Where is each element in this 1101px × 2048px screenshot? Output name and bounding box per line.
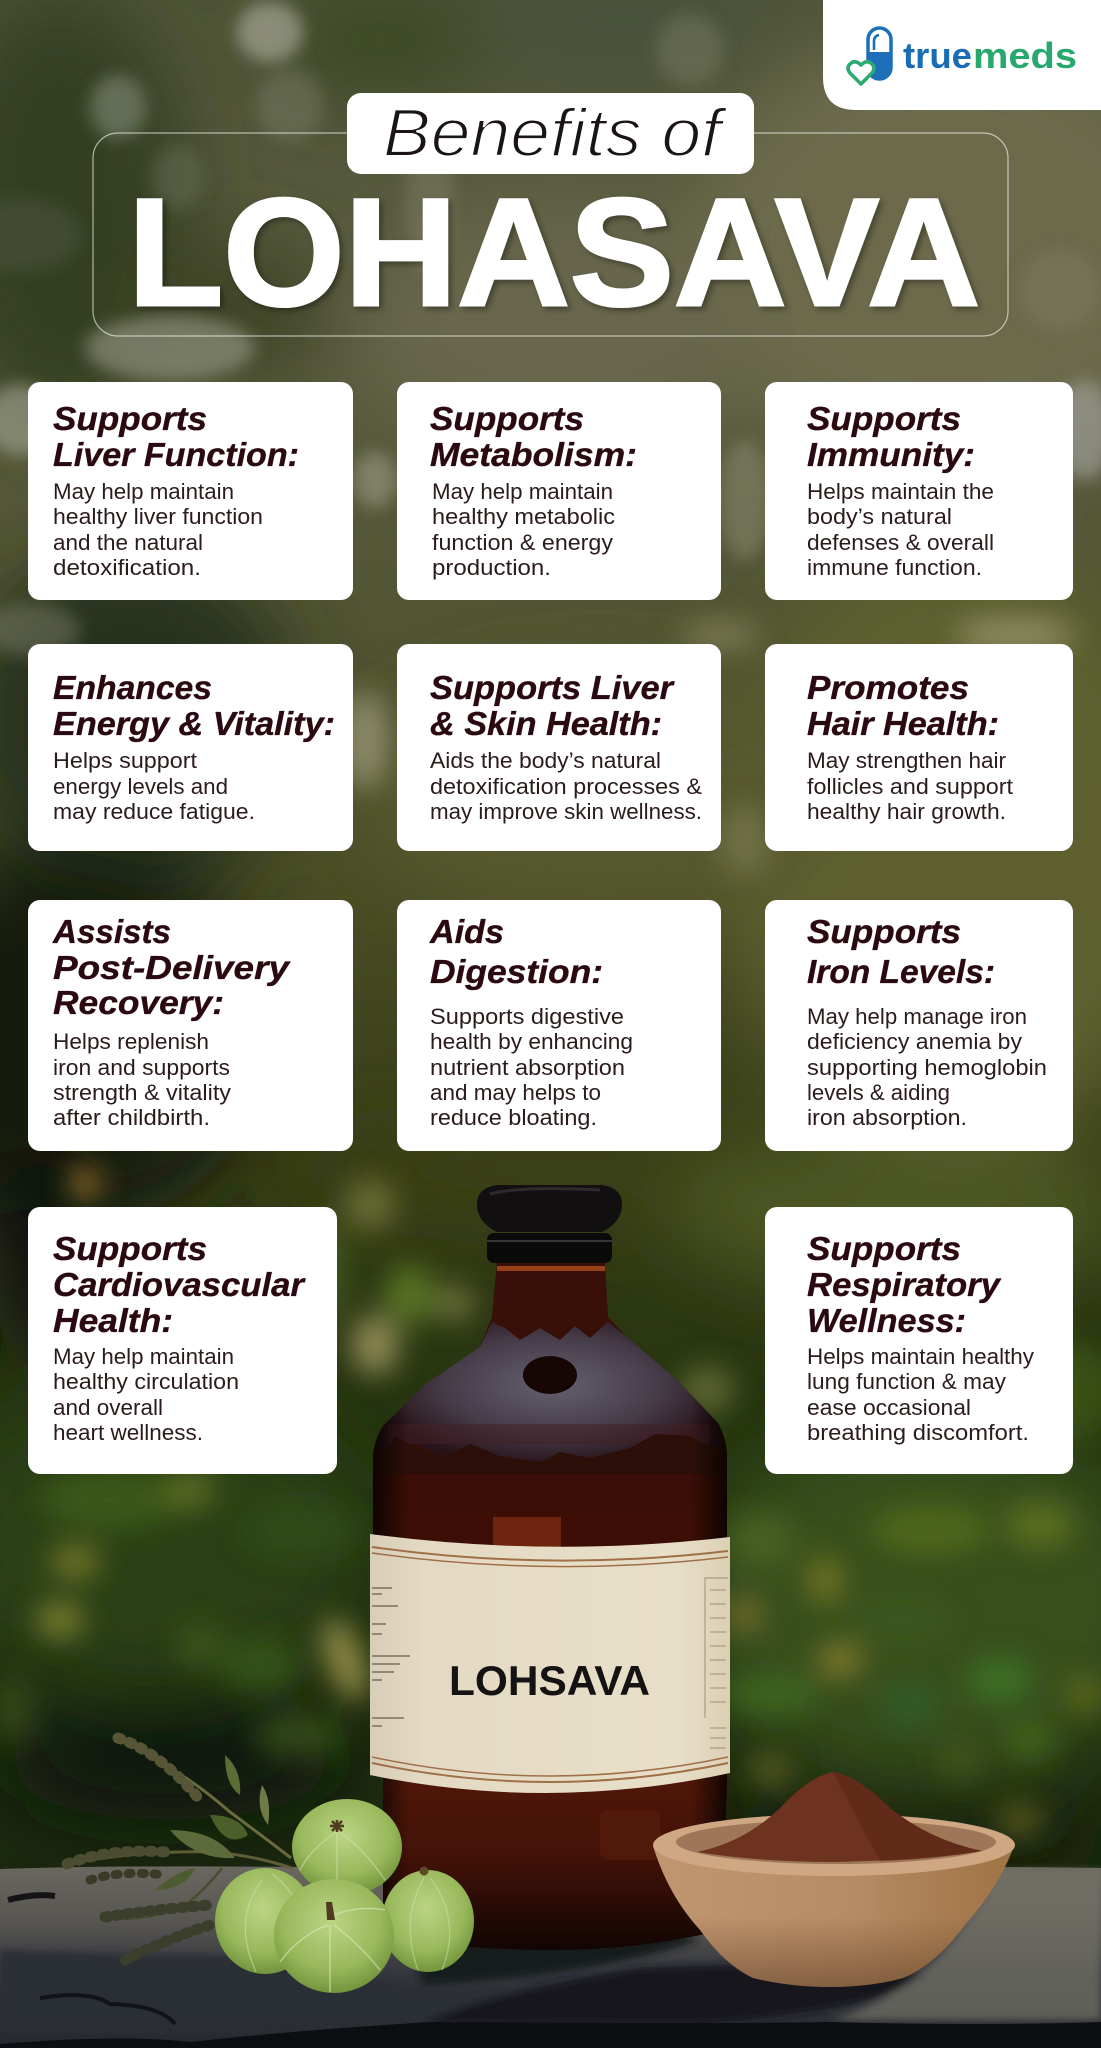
heading: Iron Levels:: [807, 953, 995, 990]
body text: and overall: [53, 1395, 163, 1420]
logo panel: truemeds: [823, 0, 1101, 110]
heading: Enhances: [53, 669, 212, 706]
body text: strength & vitality: [53, 1080, 231, 1105]
heading: [53, 1230, 306, 1339]
body text: [432, 479, 615, 580]
body text: May help maintain: [53, 1344, 234, 1369]
body text: [53, 1344, 239, 1445]
body text: May help maintain: [53, 479, 234, 504]
bowl rim: [653, 1814, 1015, 1876]
body text: [53, 1029, 231, 1130]
body text: [807, 479, 994, 580]
body text: supporting hemoglobin: [807, 1055, 1047, 1080]
body text: follicles and support: [807, 774, 1013, 799]
body text: May help manage iron: [807, 1004, 1027, 1029]
body text: lung function & may: [807, 1369, 1006, 1394]
heading: Digestion:: [430, 953, 603, 990]
heading: Hair Health:: [807, 705, 999, 742]
label text: LOHSAVA: LOHSAVA: [449, 1657, 650, 1704]
body text: body’s natural: [807, 504, 952, 529]
heading: Supports: [807, 913, 961, 950]
card: Supports Metabolism: [397, 382, 721, 600]
logo wordmark: meds: [973, 35, 1077, 76]
amla: front: [274, 1879, 394, 1993]
body text: ease occasional: [807, 1395, 971, 1420]
body text: detoxification processes &: [430, 774, 702, 799]
body text: [807, 1004, 1047, 1130]
amla: top: [292, 1799, 402, 1895]
body text: production.: [432, 555, 551, 580]
stone slab: [0, 1866, 1101, 2048]
body text: nutrient absorption: [430, 1055, 625, 1080]
logo wordmark: true: [903, 35, 972, 76]
heading: [53, 400, 299, 473]
powder mound: [697, 1772, 982, 1862]
body text: defenses & overall: [807, 530, 994, 555]
body text: [430, 748, 702, 824]
body text: Helps maintain the: [807, 479, 994, 504]
icon: capsule with heart: [848, 28, 891, 84]
body text: and may helps to: [430, 1080, 601, 1105]
body text: immune function.: [807, 555, 982, 580]
bowl of powder: [653, 1772, 1015, 1987]
body text: reduce bloating.: [430, 1105, 597, 1130]
bowl inner: [676, 1820, 996, 1864]
card: Supports Respiratory Wellness: [765, 1207, 1073, 1474]
body text: Helps maintain healthy: [807, 1344, 1034, 1369]
heading: Assists: [52, 913, 171, 950]
body text: deficiency anemia by: [807, 1029, 1022, 1054]
body text: healthy liver function: [53, 504, 263, 529]
amla fruits: [215, 1799, 474, 1993]
heading: [807, 400, 975, 473]
body text: Aids the body’s natural: [430, 748, 661, 773]
body text: [53, 748, 255, 824]
body text: Supports digestive: [430, 1004, 624, 1029]
heading: [429, 913, 603, 990]
body text: health by enhancing: [430, 1029, 633, 1054]
heading: Aids: [429, 913, 504, 950]
body text: iron absorption.: [807, 1105, 967, 1130]
body text: energy levels and: [53, 774, 228, 799]
card: Aids Digestion: [397, 900, 721, 1151]
heading: [430, 400, 637, 473]
heading: [807, 669, 999, 742]
body text: levels & aiding: [807, 1080, 950, 1105]
card: Supports Immunity: [765, 382, 1073, 600]
body text: may reduce fatigue.: [53, 799, 255, 824]
body text: [53, 479, 263, 580]
amla: left: [215, 1868, 315, 1974]
card: Promotes Hair Health: [765, 644, 1073, 851]
heading: Supports: [807, 400, 961, 437]
heading: Recovery:: [53, 984, 224, 1021]
amla: right: [382, 1866, 474, 1972]
card: Supports Iron Levels: [765, 900, 1073, 1151]
title pill: Benefits of: Benefits of: [383, 95, 727, 171]
title: LOHASAVA: LOHASAVA: [128, 167, 980, 338]
body text: [807, 1344, 1034, 1445]
card: Supports Liver Function: [28, 382, 353, 600]
heading: Supports: [53, 400, 207, 437]
body text: function & energy: [432, 530, 613, 555]
title block: [93, 93, 1008, 338]
bottle label: [370, 1534, 730, 1793]
body text: heart wellness.: [53, 1420, 203, 1445]
heading: [807, 913, 995, 990]
card: Enhances Energy & Vitality: [28, 644, 353, 851]
bottle: [370, 1185, 730, 1950]
heading: [52, 913, 291, 1021]
card: Supports Cardiovascular Health: [28, 1207, 337, 1474]
heading: Supports Liver: [430, 669, 675, 706]
heading: Wellness:: [807, 1302, 966, 1339]
body text: healthy metabolic: [432, 504, 615, 529]
logo wordmark: [903, 35, 1077, 76]
bottle glass with amber liquid: [373, 1262, 727, 1950]
body text: May strengthen hair: [807, 748, 1006, 773]
heading: Immunity:: [807, 436, 975, 473]
heading: [53, 669, 335, 742]
body text: and the natural: [53, 530, 203, 555]
heading: Metabolism:: [430, 436, 637, 473]
card: Supports Liver & Skin Health: [397, 644, 721, 851]
heading: [807, 1230, 1002, 1339]
body text: breathing discomfort.: [807, 1420, 1029, 1445]
heading: Post-Delivery: [53, 949, 291, 986]
heading: Supports: [807, 1230, 961, 1267]
heading: Respiratory: [807, 1266, 1002, 1303]
bottle shoulder sky reflection: [375, 1322, 722, 1462]
body text: detoxification.: [53, 555, 201, 580]
heading: Supports: [53, 1230, 207, 1267]
body text: iron and supports: [53, 1055, 230, 1080]
logo panel background: [823, 0, 1101, 110]
body text: after childbirth.: [53, 1105, 210, 1130]
heading: Cardiovascular: [53, 1266, 306, 1303]
bowl body: [653, 1846, 1014, 1987]
herb sprig: [67, 1738, 292, 1960]
body text: Helps support: [53, 748, 197, 773]
body text: [430, 1004, 633, 1130]
heading: Energy & Vitality:: [53, 705, 335, 742]
body text: [807, 748, 1013, 824]
bottle cap: [477, 1185, 622, 1263]
body text: may improve skin wellness.: [430, 799, 702, 824]
body text: Helps replenish: [53, 1029, 209, 1054]
heading: Promotes: [807, 669, 969, 706]
body text: healthy hair growth.: [807, 799, 1006, 824]
heading: [430, 669, 675, 742]
title outline frame: [93, 133, 1008, 336]
heading: Liver Function:: [53, 436, 299, 473]
card: Assists Post-Delivery Recovery: [28, 900, 353, 1151]
body text: healthy circulation: [53, 1369, 239, 1394]
heading: Health:: [53, 1302, 173, 1339]
dark neck reflection spot: [523, 1356, 577, 1394]
heading: Supports: [430, 400, 584, 437]
heading: & Skin Health:: [430, 705, 662, 742]
body text: May help maintain: [432, 479, 613, 504]
